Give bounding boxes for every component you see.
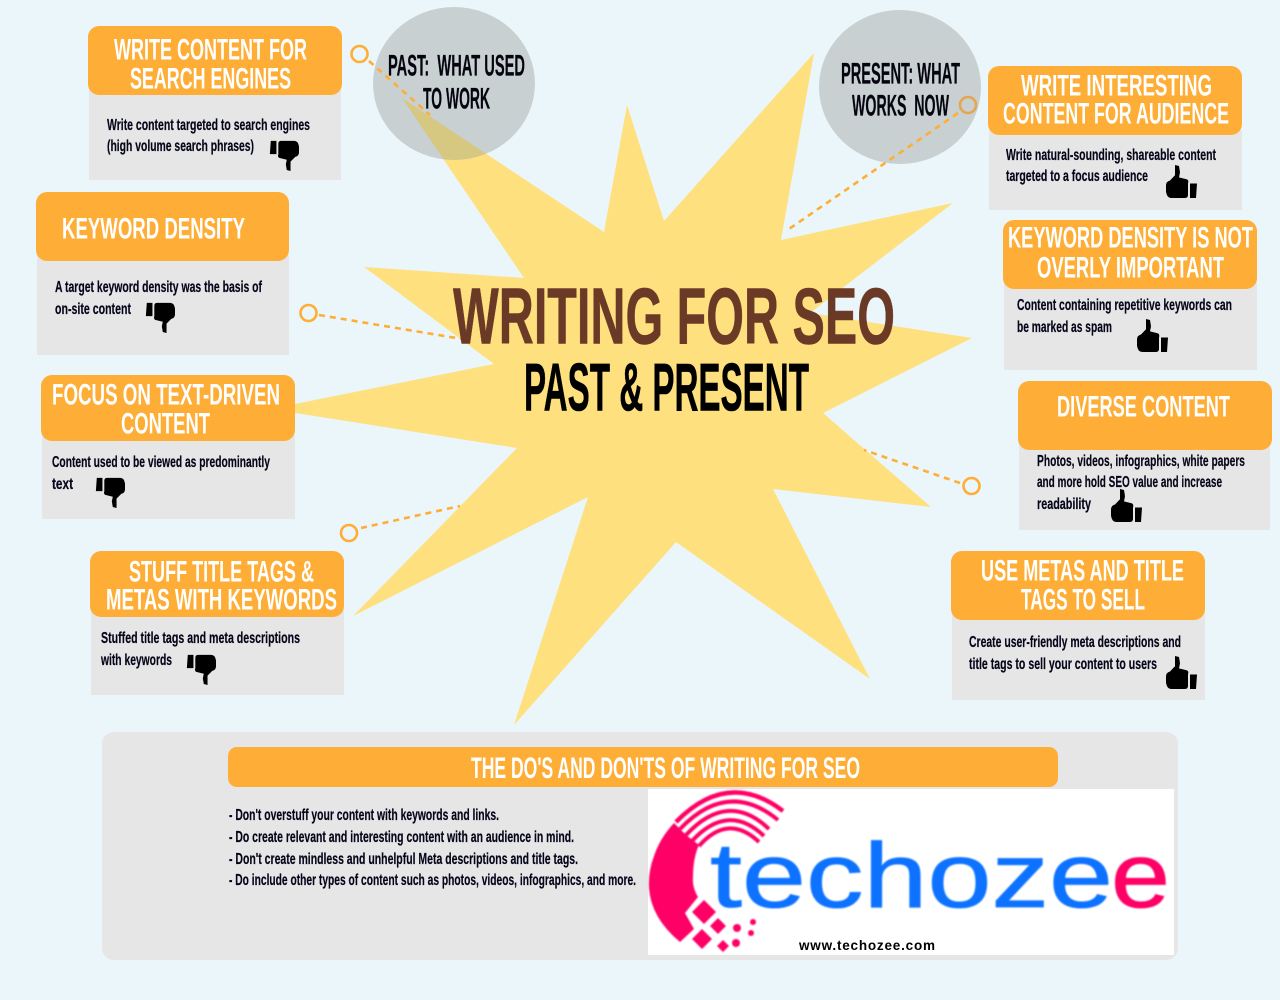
- panel: focus on text-driven content: FOCUS ON TEXT-DRIVEN: [52, 378, 280, 412]
- main title: WRITING FOR SEO: [453, 272, 895, 360]
- panel: diverse content: [1018, 381, 1272, 530]
- panel: use metas and title tags to sell: [951, 551, 1205, 700]
- panel: write content for search engines: [88, 26, 342, 180]
- panel: keyword density: on-site content: [55, 301, 131, 318]
- panel: stuff title tags and metas: with keywords: [100, 652, 172, 669]
- panel: focus on text-driven content: [41, 375, 295, 519]
- panel: do's and don'ts: [102, 732, 1178, 960]
- do's and don'ts list: [229, 807, 636, 889]
- circle: past: PAST: WHAT USED: [388, 50, 525, 82]
- do's and don'ts list: - Don't overstuff your content with keywords and links.: [229, 807, 499, 824]
- panel: write content for search engines: Write content targeted to search engines: [107, 117, 310, 134]
- circle: past: TO WORK: [423, 82, 490, 116]
- panel: keyword density: KEYWORD DENSITY: [62, 212, 245, 246]
- circle: present: [819, 10, 981, 164]
- panel: stuff title tags and metas: METAS WITH KEYWORDS: [106, 584, 337, 616]
- panel: stuff title tags and metas: STUFF TITLE TAGS &: [129, 556, 314, 588]
- icon: thumbs up: [1137, 319, 1168, 352]
- panel: use metas and title tags to sell: title tags to sell your content to users: [969, 656, 1157, 673]
- main title: [453, 272, 895, 426]
- icon: thumbs down: [96, 478, 125, 508]
- do's and don'ts list: - Do create relevant and interesting content with an audience in mind.: [229, 829, 574, 846]
- techozee logo: www.techozee.com: [798, 938, 935, 953]
- panel: focus on text-driven content: text: [52, 476, 73, 493]
- do's and don'ts list: - Do include other types of content such as photos, videos, infographics, and more.: [229, 872, 636, 889]
- connector: write content for search engines: [352, 46, 430, 115]
- do's and don'ts heading: THE DO'S AND DON'TS OF WRITING FOR SEO: [471, 752, 860, 785]
- icon: thumbs down: [270, 141, 299, 171]
- panel: keyword density is not overly important: be marked as spam: [1017, 319, 1112, 336]
- panel: write interesting content: [988, 66, 1242, 210]
- panel: stuff title tags and metas: [90, 551, 344, 695]
- panel: keyword density: [36, 192, 289, 355]
- panel: keyword density: A target keyword density was the basis of: [55, 279, 262, 296]
- icon: thumbs up: [1166, 165, 1197, 198]
- icon: thumbs down: [187, 655, 216, 685]
- techozee logo: [648, 789, 1174, 955]
- panel: write interesting content: targeted to a focus audience: [1006, 168, 1148, 185]
- techozee logo: e: [1111, 825, 1170, 927]
- circle: present: WORKS NOW: [852, 90, 949, 122]
- connector: stuff title tags: [341, 506, 460, 541]
- connector: keyword density: [300, 305, 462, 339]
- main title: PAST & PRESENT: [524, 350, 809, 426]
- do's and don'ts list: - Don't create mindless and unhelpful Meta descriptions and title tags.: [229, 851, 578, 868]
- circle: past: [373, 7, 535, 160]
- icon: thumbs up: [1111, 489, 1142, 522]
- icon: thumbs up: [1166, 656, 1197, 689]
- do's and don'ts heading: [228, 747, 1058, 787]
- circle: present: PRESENT: WHAT: [841, 58, 960, 90]
- panel: focus on text-driven content: CONTENT: [121, 408, 210, 440]
- panel: write content for search engines: WRITE CONTENT FOR: [114, 34, 307, 66]
- panel: use metas and title tags to sell: TAGS TO SELL: [1021, 584, 1145, 616]
- icon: thumbs down: [146, 303, 175, 333]
- techozee logo: techoze: [710, 825, 1113, 927]
- panel: write content for search engines: (high volume search phrases): [107, 138, 254, 155]
- panel: diverse content: readability: [1037, 496, 1091, 513]
- panel: focus on text-driven content: Content used to be viewed as predominantly: [52, 454, 270, 471]
- starburst background: [270, 53, 972, 725]
- panel: keyword density is not overly important: [1003, 220, 1257, 370]
- connector: present circle: [786, 97, 976, 231]
- panel: write content for search engines: SEARCH ENGINES: [130, 62, 291, 96]
- panel: stuff title tags and metas: Stuffed title tags and meta descriptions: [101, 630, 300, 647]
- connector: diverse content: [864, 450, 980, 494]
